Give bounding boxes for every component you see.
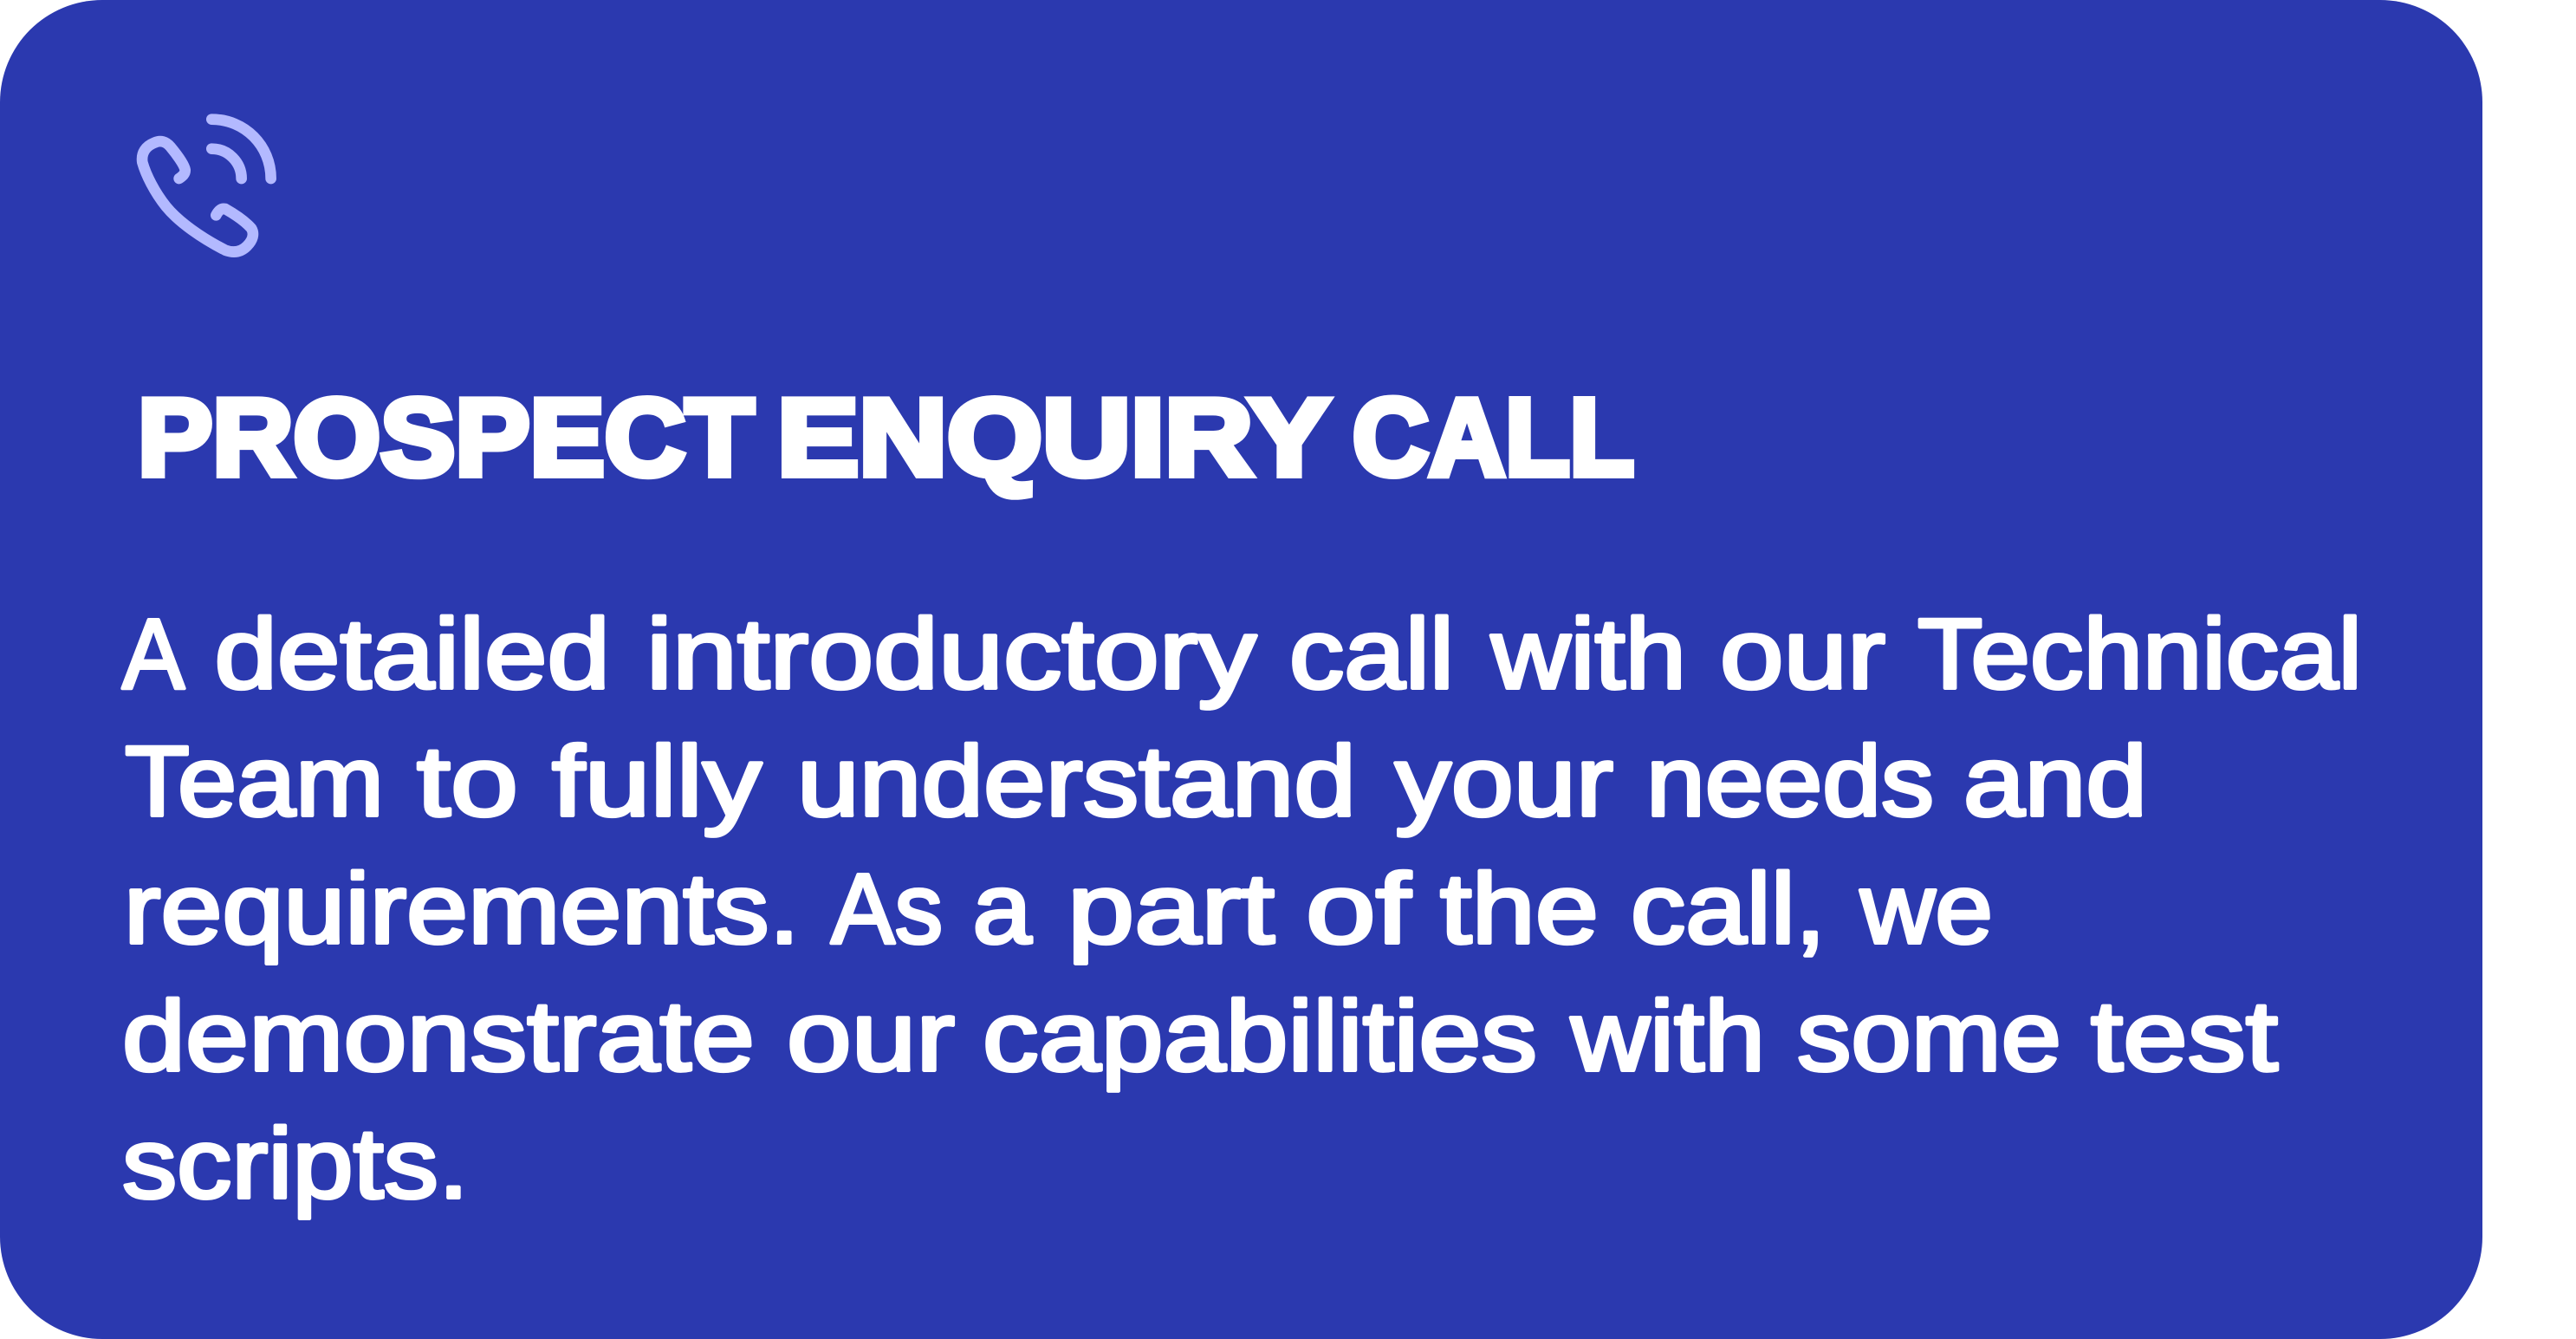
- body text: our: [1720, 599, 1885, 710]
- body text: needs: [1646, 726, 1934, 837]
- body text: capabilities: [983, 981, 1537, 1092]
- heading: CALL: [1353, 376, 1634, 498]
- body text: call,: [1631, 854, 1826, 965]
- body text: call: [1289, 599, 1454, 710]
- body text: [122, 599, 2362, 1219]
- body text: demonstrate: [122, 981, 755, 1092]
- body text: we: [1859, 854, 1993, 965]
- body text: your: [1395, 726, 1613, 837]
- body text: with: [1490, 599, 1686, 710]
- body text: requirements.: [124, 854, 800, 965]
- heading: ENQUIRY: [777, 376, 1330, 498]
- icon: phone with signal waves: [142, 120, 271, 252]
- heading: PROSPECT: [138, 376, 754, 498]
- body text: a: [972, 854, 1032, 965]
- body text: the: [1440, 854, 1599, 965]
- body text: fully: [552, 726, 762, 837]
- body text: and: [1963, 726, 2147, 837]
- body text: to: [417, 726, 518, 837]
- body text: understand: [797, 726, 1356, 837]
- body text: some: [1797, 981, 2061, 1092]
- body text: our: [787, 981, 955, 1092]
- body text: Team: [125, 726, 384, 837]
- body text: test: [2091, 981, 2278, 1092]
- body text: with: [1570, 981, 1765, 1092]
- body text: detailed: [215, 599, 610, 710]
- body text: part: [1067, 854, 1275, 965]
- heading: [138, 376, 1634, 498]
- body text: introductory: [646, 599, 1257, 710]
- body text: As: [831, 854, 943, 965]
- body text: A: [122, 599, 185, 710]
- body text: Technical: [1917, 599, 2362, 710]
- body text: scripts.: [122, 1108, 469, 1219]
- body text: of: [1306, 854, 1411, 965]
